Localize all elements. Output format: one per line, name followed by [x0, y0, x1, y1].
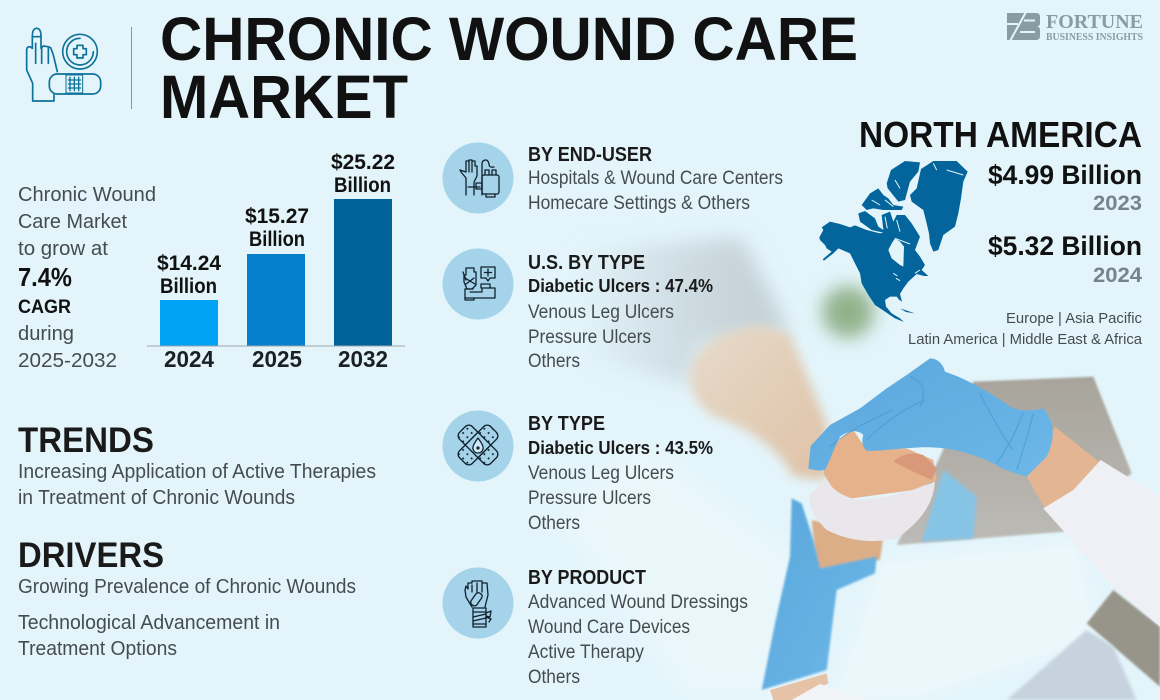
drivers: DRIVERS — [18, 536, 164, 575]
logo: Fortune Business Insights: FORTUNE — [1046, 11, 1143, 33]
CAGR text block: CAGR — [18, 297, 71, 318]
segment: U.S. by type: U.S. BY TYPE — [528, 252, 645, 274]
CAGR text block — [18, 184, 156, 372]
drivers: Treatment Options — [18, 638, 177, 660]
segment: by type: BY TYPE — [528, 413, 605, 435]
segment: by product: Others — [528, 667, 580, 688]
CAGR text block: 2025-2032 — [18, 350, 117, 372]
bar chart: Billion — [334, 174, 391, 197]
dark floor — [1087, 590, 1160, 687]
icon: hand, medical cross and bandage — [27, 28, 101, 101]
bar chart: 2025 — [252, 346, 302, 372]
trends — [18, 421, 376, 509]
header divider — [130, 27, 132, 109]
foot — [823, 430, 937, 500]
icon: bandaged hand on bed with medical sign — [442, 248, 514, 320]
bar chart: Billion — [160, 275, 217, 298]
regional statistics: North America: 2023 — [1093, 192, 1142, 215]
tablet — [897, 377, 1132, 545]
bar chart: $25.22 — [331, 151, 395, 174]
segment: by end-user: Homecare Settings & Others — [528, 193, 750, 214]
logo: Fortune Business Insights — [1007, 11, 1143, 43]
upper glove — [808, 358, 1053, 477]
regional statistics: North America: NORTH AMERICA — [859, 114, 1142, 155]
icon: bandaged wrist and hand — [442, 568, 514, 638]
forearm — [1027, 427, 1101, 508]
drivers: Technological Advancement in — [18, 612, 280, 634]
leg — [690, 325, 827, 480]
icon: hand with IV drip — [442, 142, 514, 214]
bar chart: Billion — [249, 228, 305, 251]
CAGR text block: during — [18, 323, 74, 345]
regional statistics: North America — [859, 114, 1142, 287]
segment: U.S. by type: Others — [528, 351, 580, 372]
trends: in Treatment of Chronic Wounds — [18, 487, 295, 509]
segment: by type: Others — [528, 513, 580, 534]
segment: by type: Diabetic Ulcers : 43.5% — [528, 438, 713, 458]
regional statistics: North America: 2024 — [1093, 264, 1142, 287]
bar chart — [147, 151, 405, 372]
lower hand skin and cuff — [770, 673, 828, 700]
segment: by product: Wound Care Devices — [528, 617, 690, 638]
title — [160, 5, 858, 131]
other regions — [908, 310, 1143, 348]
bar chart: $14.24 — [157, 252, 221, 275]
trends: Increasing Application of Active Therapies — [18, 461, 376, 483]
segment: by end-user: BY END-USER — [528, 144, 652, 166]
bar chart: 2032 — [338, 346, 388, 372]
segment: by type: Pressure Ulcers — [528, 488, 651, 509]
segment: by type: Venous Leg Ulcers — [528, 463, 674, 484]
bar chart: 2024 — [164, 346, 214, 372]
title: CHRONIC WOUND CARE — [160, 5, 858, 73]
icon: crossed bandages with drop — [442, 410, 514, 482]
trends: TRENDS — [18, 421, 154, 460]
segment: by product: BY PRODUCT — [528, 567, 646, 589]
segment: U.S. by type: Venous Leg Ulcers — [528, 302, 674, 323]
segment: by product: Advanced Wound Dressings — [528, 592, 748, 613]
title: MARKET — [160, 63, 408, 131]
CAGR text block: to grow at — [18, 238, 108, 260]
regional statistics: North America: $5.32 Billion — [988, 231, 1142, 261]
lower glove — [762, 498, 877, 690]
drivers — [18, 536, 356, 660]
bandage — [810, 478, 935, 541]
map: North America — [819, 161, 968, 322]
segment: by product — [528, 567, 748, 688]
Hudson Bay — [888, 238, 904, 267]
other regions: Europe | Asia Pacific — [1006, 310, 1142, 327]
CAGR text block: Chronic Wound — [18, 184, 156, 206]
segment: U.S. by type: Diabetic Ulcers : 47.4% — [528, 276, 713, 296]
other regions: Latin America | Middle East & Africa — [908, 331, 1143, 348]
trousers — [1007, 630, 1137, 700]
coat sleeve — [1043, 460, 1160, 627]
drivers: Growing Prevalence of Chronic Wounds — [18, 576, 356, 598]
regional statistics: North America: $4.99 Billion — [988, 160, 1142, 190]
CAGR text block: Care Market — [18, 211, 127, 233]
segment: U.S. by type — [528, 252, 713, 372]
bar chart: $15.27 — [245, 205, 309, 228]
segment: by type — [528, 413, 713, 534]
segment: by end-user: Hospitals & Wound Care Centers — [528, 168, 783, 189]
CAGR text block: 7.4% — [18, 262, 72, 292]
segment: by end-user — [528, 144, 783, 214]
segment: by product: Active Therapy — [528, 642, 644, 663]
logo: Fortune Business Insights: BUSINESS INSIGHTS — [1046, 32, 1143, 43]
segment: U.S. by type: Pressure Ulcers — [528, 327, 651, 348]
